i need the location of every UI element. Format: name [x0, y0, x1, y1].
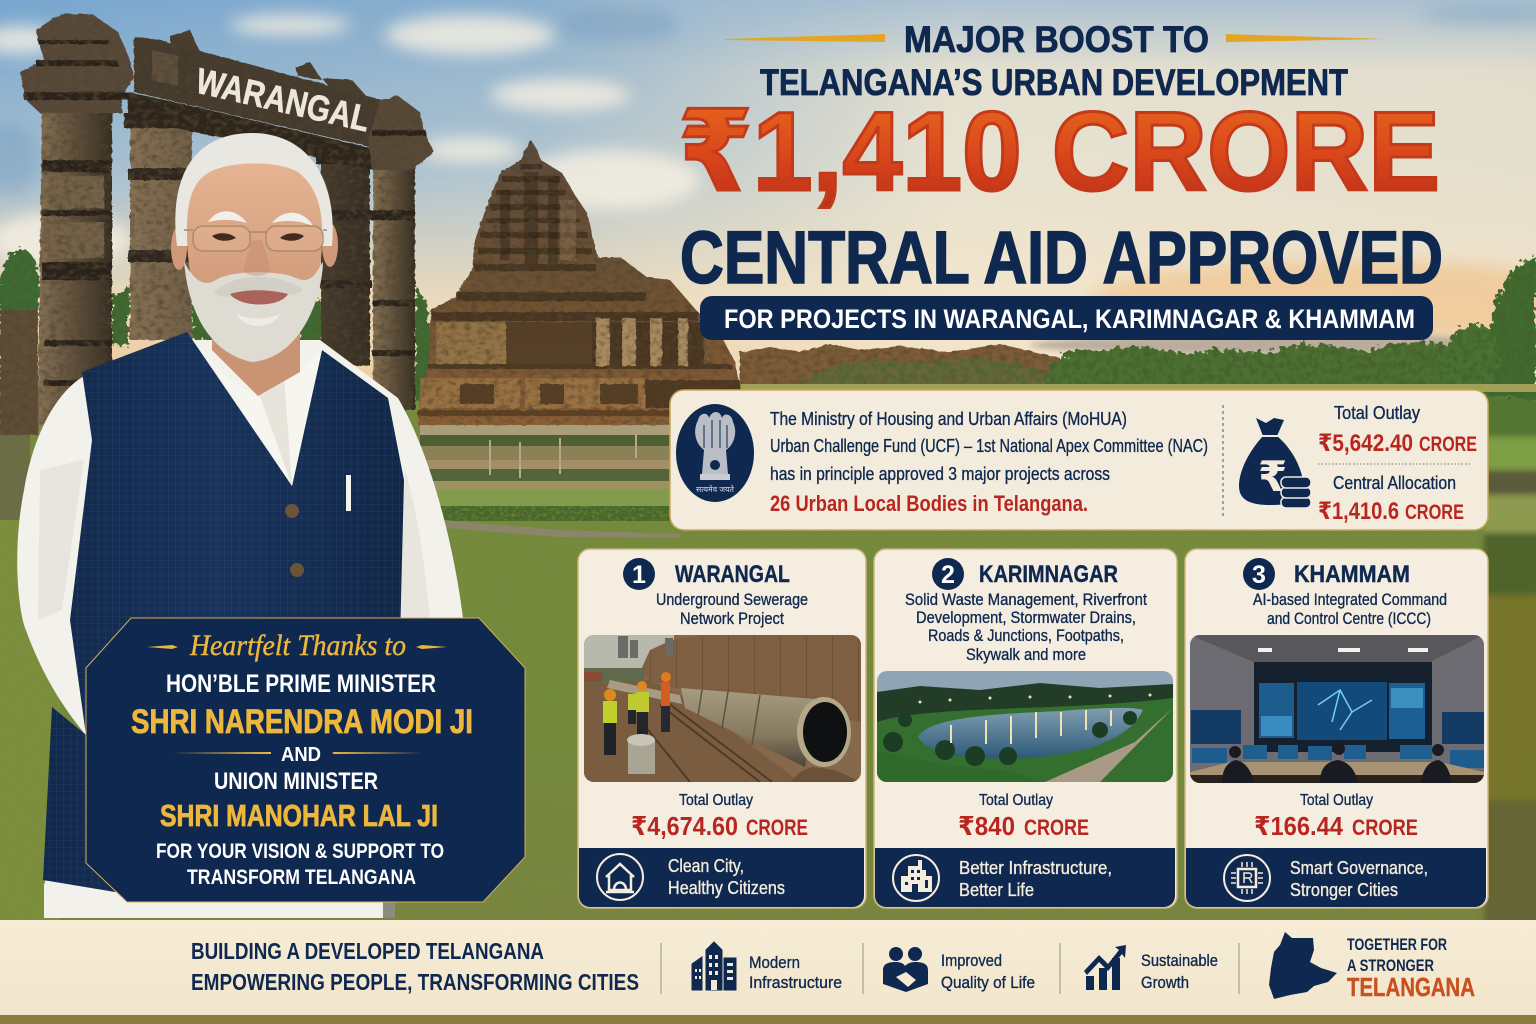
front left column	[38, 112, 112, 425]
project description: Development, Stormwater Drains,	[916, 608, 1136, 627]
benefit strip	[875, 848, 1175, 907]
total outlay: Total Outlay	[1300, 792, 1373, 809]
prime minister	[131, 670, 473, 741]
photo: pipeline construction	[584, 635, 861, 782]
monument: Warangal gate	[20, 14, 434, 425]
subheading pill: FOR PROJECTS IN WARANGAL, KARIMNAGAR & KHAMMAM	[724, 304, 1415, 334]
photo: command centre	[1190, 635, 1484, 783]
panel: Khammam project card	[1185, 549, 1488, 908]
total outlay: ₹840	[958, 811, 1015, 841]
icon: people shaking hands	[883, 947, 928, 992]
number badge 2	[932, 558, 964, 590]
beard	[184, 262, 323, 362]
project description: AI-based Integrated Command	[1253, 590, 1447, 609]
footer slogan: EMPOWERING PEOPLE, TRANSFORMING CITIES	[191, 969, 639, 995]
number badge 2: 2	[941, 561, 955, 589]
subheading pill	[700, 296, 1433, 340]
footer slogan	[191, 938, 639, 995]
project description: Network Project	[680, 609, 784, 628]
panel: Karimnagar project card	[874, 549, 1177, 908]
approval text: The Ministry of Housing and Urban Affairs (MoHUA)	[770, 408, 1127, 429]
central allocation figure	[1318, 473, 1464, 525]
benefit: modern infrastructure	[692, 942, 842, 992]
vest	[43, 332, 404, 892]
temple illustration	[418, 140, 742, 425]
closing message: TRANSFORM TELANGANA	[187, 866, 416, 889]
icon: clean house	[597, 854, 643, 900]
approval text	[770, 408, 1208, 516]
neck and ears	[212, 300, 300, 396]
total outlay	[958, 792, 1089, 841]
heading: major boost	[725, 19, 1385, 103]
field bands near the temple	[420, 425, 680, 538]
total outlay: CRORE	[1352, 815, 1418, 840]
union minister: SHRI MANOHAR LAL JI	[160, 798, 438, 833]
benefit strip: Better Infrastructure,	[959, 858, 1112, 878]
total outlay: ₹4,674.60	[631, 811, 738, 841]
workers	[603, 672, 671, 755]
total outlay figure: CRORE	[1419, 433, 1477, 456]
central allocation figure: Central Allocation	[1333, 473, 1456, 493]
total outlay: CRORE	[746, 815, 808, 840]
panel: heartfelt thanks	[86, 618, 525, 902]
closing message: FOR YOUR VISION & SUPPORT TO	[156, 840, 444, 863]
prime minister: SHRI NARENDRA MODI JI	[131, 703, 473, 741]
approval text: has in principle approved 3 major projects across	[770, 463, 1110, 484]
benefit strip: Clean City,	[668, 856, 744, 876]
heading: major boost: TELANGANA’S URBAN DEVELOPMENT	[760, 62, 1348, 103]
benefit strip: Stronger Cities	[1290, 880, 1398, 900]
panel: Warangal project card	[578, 549, 866, 908]
project description: Roads & Junctions, Footpaths,	[928, 626, 1124, 645]
shirt collar	[186, 326, 322, 486]
eyes and nose	[212, 233, 304, 241]
total outlay	[1254, 792, 1418, 841]
closing slogan: A STRONGER	[1347, 956, 1434, 975]
benefit: sustainable growth	[1084, 945, 1218, 992]
hair	[175, 133, 333, 246]
glasses	[184, 226, 327, 251]
total outlay: Total Outlay	[679, 792, 753, 809]
icon: buildings	[692, 942, 736, 990]
closing slogan: TOGETHER FOR	[1347, 935, 1447, 954]
number badge 1: 1	[632, 561, 646, 589]
heading: major boost: MAJOR BOOST TO	[904, 19, 1209, 60]
city name: WARANGAL	[675, 561, 790, 588]
back columns	[130, 113, 370, 366]
prime minister: HON’BLE PRIME MINISTER	[166, 670, 436, 698]
lintel	[134, 37, 384, 150]
benefit strip	[1186, 848, 1486, 907]
total outlay figure: ₹5,642.40	[1318, 430, 1413, 457]
footer band	[0, 920, 1536, 1024]
benefit strip: Better Life	[959, 880, 1034, 900]
number badge 3: 3	[1252, 561, 1266, 589]
thanks heading: Heartfelt Thanks to	[189, 629, 406, 662]
benefit strip: Healthy Citizens	[668, 878, 785, 898]
closing slogan: TELANGANA	[1347, 972, 1475, 1002]
number badge 3	[1243, 558, 1275, 590]
headline amount: ₹1,410 CRORE	[678, 89, 1440, 214]
total outlay: ₹166.44	[1254, 811, 1343, 841]
vest buttons and pen	[285, 475, 351, 577]
icon: Telangana map	[1269, 932, 1337, 999]
project description	[1253, 590, 1447, 628]
photo: riverfront	[877, 671, 1173, 782]
project description: and Control Centre (ICCC)	[1267, 609, 1431, 628]
distant ruins and trees	[0, 249, 1536, 435]
gold title rules	[725, 34, 1385, 42]
kurta	[17, 340, 465, 918]
union minister: UNION MINISTER	[214, 768, 378, 795]
total outlay figure	[1318, 403, 1477, 457]
person: Prime Minister portrait	[17, 133, 465, 918]
benefit: quality of life: Improved	[941, 951, 1002, 970]
and divider: AND	[281, 744, 321, 766]
icon: money bag	[1239, 418, 1311, 508]
benefit strip: Smart Governance,	[1290, 858, 1428, 878]
project description: Solid Waste Management, Riverfront	[905, 590, 1147, 609]
benefit strip	[579, 848, 864, 907]
icon: AI chip	[1224, 855, 1270, 901]
union minister	[160, 768, 438, 833]
central allocation figure: CRORE	[1405, 501, 1464, 524]
benefit: quality of life: Quality of Life	[941, 973, 1035, 992]
icon: state emblem	[676, 404, 754, 502]
benefit: modern infrastructure: Infrastructure	[749, 973, 842, 992]
approval text: 26 Urban Local Bodies in Telangana.	[770, 491, 1088, 516]
benefit: sustainable growth: Sustainable	[1141, 951, 1218, 970]
approval text: Urban Challenge Fund (UCF) – 1st National Apex Committee (NAC)	[770, 435, 1208, 456]
project description	[905, 590, 1147, 664]
icon: growth chart	[1084, 945, 1126, 990]
city name: KARIMNAGAR	[979, 561, 1118, 588]
project description: Underground Sewerage	[656, 590, 808, 609]
gate sign text: WARANGAL	[192, 60, 374, 140]
benefit: modern infrastructure: Modern	[749, 953, 800, 972]
icon: city buildings	[893, 855, 939, 901]
central allocation figure: ₹1,410.6	[1318, 498, 1399, 525]
footer slogan: BUILDING A DEVELOPED TELANGANA	[191, 938, 544, 964]
closing message	[156, 840, 444, 889]
right edge field	[1484, 395, 1536, 924]
benefit: quality of life	[883, 947, 1035, 992]
total outlay: CRORE	[1024, 815, 1089, 840]
icon: state emblem: सत्यमेव जयते	[696, 484, 734, 494]
project description	[656, 590, 808, 628]
panel: approval summary	[670, 390, 1488, 530]
total outlay: Total Outlay	[979, 792, 1053, 809]
total outlay figure: Total Outlay	[1334, 403, 1420, 423]
city name: KHAMMAM	[1294, 561, 1410, 588]
right column	[373, 160, 415, 410]
project description: Skywalk and more	[966, 645, 1086, 664]
icon: money bag: ₹	[1258, 453, 1287, 500]
closing slogan	[1347, 935, 1475, 1002]
benefit: sustainable growth: Growth	[1141, 973, 1189, 992]
face	[187, 163, 322, 346]
eyebrows	[208, 211, 313, 226]
total outlay	[631, 792, 808, 841]
number badge 1	[623, 558, 655, 590]
